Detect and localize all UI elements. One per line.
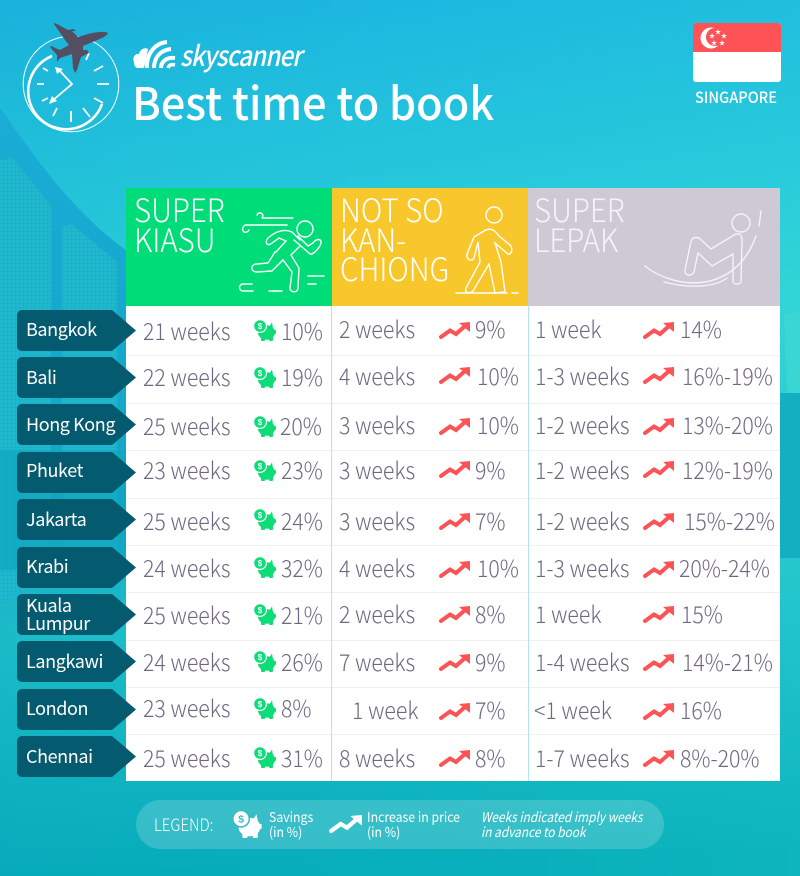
Kuala Lumpur: Super Kiasu [143,597,323,631]
London: Not So Kan-Chiong: 1 week [352,692,418,726]
Hong Kong: Super Lepak [535,407,773,441]
Kuala Lumpur: Super Kiasu: 21% [281,597,323,631]
Jakarta: Super Kiasu: 24% [281,503,323,537]
Phuket: Super Kiasu [143,452,323,486]
Chennai: Super Lepak [535,740,759,774]
Phuket: Super Kiasu: 23 weeks [143,452,230,486]
row tag: London [17,689,136,730]
heading: Not So Kan-Chiong [340,186,449,291]
price increase label: (in %) [367,821,400,841]
legend [136,800,664,849]
Bali: Not So Kan-Chiong: 4 weeks [339,358,415,392]
Hong Kong: Super Lepak: 1-2 weeks [535,407,630,441]
Hong Kong: Super Kiasu [143,408,322,442]
Bali: Super Lepak [535,358,773,392]
legend note: Weeks indicated imply weeks [481,806,642,826]
Phuket: Super Lepak: 12%-19% [682,452,773,486]
row tag: Krabi [17,547,136,588]
heading: Not So Kan-Chiong: NOT SO [340,186,444,232]
Chennai: Super Lepak: 8%-20% [680,740,759,774]
panel: Not So Kan-Chiong header [332,188,528,306]
row tag: Langkawi: Langkawi [26,648,103,674]
Krabi: Super Lepak: 1-3 weeks [535,550,630,584]
Langkawi: Super Kiasu: 24 weeks [143,644,230,678]
icon: reclining person [644,210,762,287]
row tag: Bangkok: Bangkok [26,316,97,342]
Bali: Super Lepak: 16%-19% [682,358,773,392]
Phuket: Not So Kan-Chiong: 9% [475,452,506,486]
heading: Super Lepak: SUPER [534,186,625,232]
Kuala Lumpur: Super Lepak: 1 week [535,596,601,630]
Krabi: Super Kiasu: 24 weeks [143,550,230,584]
Bangkok: Not So Kan-Chiong [339,311,506,345]
London: Super Lepak [534,692,722,726]
Chennai: Super Kiasu: 31% [281,740,323,774]
Jakarta: Not So Kan-Chiong: 7% [475,503,506,537]
Bangkok: Super Lepak: 1 week [535,311,601,345]
icon: price increase [329,815,362,833]
flag: Singapore [693,23,781,82]
Kuala Lumpur: Not So Kan-Chiong: 8% [475,596,506,630]
Chennai: Super Lepak: 1-7 weeks [535,740,630,774]
Chennai: Not So Kan-Chiong: 8% [475,740,506,774]
icon: walking person [455,206,519,294]
Jakarta: Super Lepak: 1-2 weeks [535,503,630,537]
London: Super Kiasu [143,690,312,724]
Krabi: Super Kiasu [143,550,323,584]
legend note: in advance to book [481,821,586,841]
Krabi: Not So Kan-Chiong: 4 weeks [339,550,415,584]
icon: running person [238,212,325,292]
heading: Not So Kan-Chiong: CHIONG [340,245,449,291]
Hong Kong: Not So Kan-Chiong: 10% [477,407,519,441]
row tag: Kuala Lumpur [17,594,136,635]
London: Super Kiasu: 23 weeks [143,690,230,724]
Bangkok: Super Kiasu: 21 weeks [143,313,230,347]
savings label [269,809,313,839]
heading: Super Lepak [534,186,625,262]
price increase label [367,809,460,839]
Chennai: Super Kiasu: 25 weeks [143,740,230,774]
legend heading: LEGEND: [154,811,213,836]
row tag: Bangkok [17,310,136,351]
row tag: London: London [26,695,88,721]
Hong Kong: Super Kiasu: 20% [280,408,322,442]
Krabi: Super Lepak: 20%-24% [679,550,770,584]
Langkawi: Super Lepak [535,644,773,678]
London: Not So Kan-Chiong [352,692,506,726]
Bali: Super Kiasu [143,359,323,393]
Langkawi: Not So Kan-Chiong: 9% [475,644,506,678]
Chennai: Not So Kan-Chiong [339,740,506,774]
Bangkok: Super Kiasu [143,313,323,347]
row tag: Hong Kong: Hong Kong [26,411,115,437]
logo: skyscanner: skyscanner [180,35,301,75]
Bali: Super Kiasu: 19% [281,359,323,393]
heading: Super Kiasu [134,186,225,262]
Jakarta: Super Lepak: 15%-22% [684,503,775,537]
Phuket: Super Kiasu: 23% [281,452,323,486]
London: Super Lepak: <1 week [534,692,612,726]
Phuket: Super Lepak: 1-2 weeks [535,452,630,486]
Bangkok: Not So Kan-Chiong: 9% [475,311,506,345]
Langkawi: Not So Kan-Chiong [339,644,506,678]
row tag: Jakarta [17,499,136,540]
Bangkok: Super Lepak: 14% [680,311,722,345]
Phuket: Super Lepak [535,452,773,486]
price increase label: Increase in price [367,806,460,826]
Bangkok: Not So Kan-Chiong: 2 weeks [339,311,415,345]
Hong Kong: Not So Kan-Chiong: 3 weeks [339,407,415,441]
London: Super Kiasu: 8% [281,690,312,724]
Langkawi: Super Kiasu: 26% [281,644,323,678]
London: Not So Kan-Chiong: 7% [475,692,506,726]
Bangkok: Super Kiasu: 10% [281,313,323,347]
row tag: Bali: Bali [26,364,56,390]
Kuala Lumpur: Super Lepak [535,596,723,630]
Krabi: Super Kiasu: 32% [281,550,323,584]
Krabi: Not So Kan-Chiong [339,550,519,584]
row tag: Chennai: Chennai [26,743,93,769]
heading: Super Kiasu: KIASU [134,216,215,262]
Kuala Lumpur: Super Lepak: 15% [681,596,723,630]
savings label: Savings [269,806,313,826]
London: Super Lepak: 16% [680,692,722,726]
Krabi: Super Lepak [535,550,770,584]
savings label: (in %) [269,821,302,841]
row tag: Langkawi [17,641,136,682]
Kuala Lumpur: Super Kiasu: 25 weeks [143,597,230,631]
Jakarta: Not So Kan-Chiong [339,503,506,537]
row tag: Phuket: Phuket [26,457,83,483]
Bangkok: Super Lepak [535,311,722,345]
icon: clock with plane [22,23,120,132]
Hong Kong: Super Kiasu: 25 weeks [143,408,230,442]
heading: Not So Kan-Chiong: KAN- [340,216,406,262]
Jakarta: Super Kiasu [143,503,323,537]
Hong Kong: Not So Kan-Chiong [339,407,519,441]
Bali: Not So Kan-Chiong [339,358,519,392]
heading: Super Lepak: LEPAK [534,216,618,262]
panel: Super Kiasu header [126,188,332,306]
Langkawi: Super Lepak: 14%-21% [682,644,773,678]
Chennai: Super Kiasu [143,740,323,774]
Phuket: Not So Kan-Chiong: 3 weeks [339,452,415,486]
Jakarta: Not So Kan-Chiong: 3 weeks [339,503,415,537]
row tag: Jakarta: Jakarta [26,506,86,532]
Chennai: Not So Kan-Chiong: 8 weeks [339,740,415,774]
Bali: Super Kiasu: 22 weeks [143,359,230,393]
title: Best time to book [132,68,494,133]
Langkawi: Super Kiasu [143,644,323,678]
Krabi: Not So Kan-Chiong: 10% [477,550,519,584]
Kuala Lumpur: Not So Kan-Chiong [339,596,506,630]
Bali: Super Lepak: 1-3 weeks [535,358,630,392]
icon: savings [234,811,262,838]
Bali: Not So Kan-Chiong: 10% [477,358,519,392]
table background [126,306,780,781]
legend note [481,809,642,839]
Langkawi: Not So Kan-Chiong: 7 weeks [339,644,415,678]
row tag: Bali [17,357,136,398]
heading: Super Kiasu: SUPER [134,186,225,232]
flag caption: SINGAPORE [695,86,777,108]
Jakarta: Super Kiasu: 25 weeks [143,503,230,537]
row tag: Phuket [17,452,136,493]
panel: Super Lepak header [528,188,780,306]
Langkawi: Super Lepak: 1-4 weeks [535,644,630,678]
Hong Kong: Super Lepak: 13%-20% [682,407,773,441]
Phuket: Not So Kan-Chiong [339,452,506,486]
row tag: Krabi: Krabi [26,553,68,579]
row tag: Chennai [17,736,136,777]
Jakarta: Super Lepak [535,503,775,537]
row tag: Hong Kong [17,404,136,445]
Kuala Lumpur: Not So Kan-Chiong: 2 weeks [339,596,415,630]
row tag: Kuala Lumpur: Lumpur [26,610,90,636]
row tag: Kuala Lumpur: Kuala [26,592,72,618]
